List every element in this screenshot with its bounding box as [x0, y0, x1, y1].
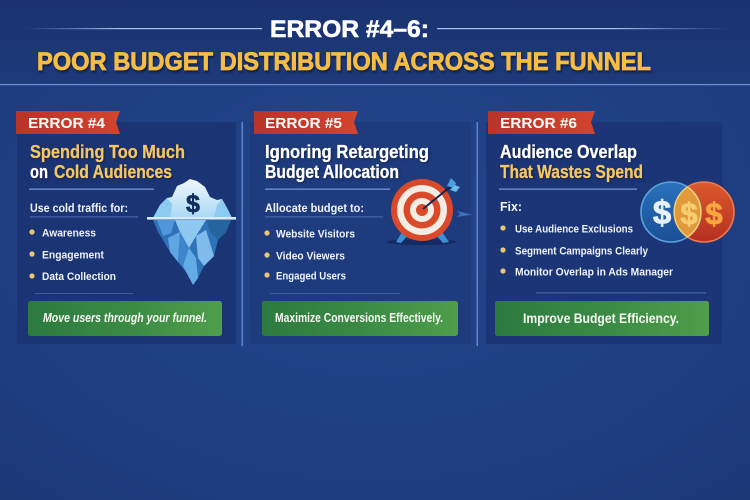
- heading: ignoring retargeting budget allocation: Ignoring Retargeting: [265, 142, 429, 162]
- list: retargeting audiences: Video Viewers: [276, 250, 345, 262]
- subheading: fix: Fix:: [500, 200, 522, 214]
- ribbon: error 5: ERROR #5: [265, 115, 342, 132]
- list: cold traffic uses: Engagement: [42, 250, 104, 262]
- icon: overlapping dollar circles: $: [680, 196, 698, 231]
- title: poor budget distribution: POOR BUDGET DISTRIBUTION ACROSS THE FUNNEL: [37, 48, 651, 76]
- ribbon: error 6: ERROR #6: [500, 115, 577, 132]
- ribbon: error 4: [16, 111, 120, 134]
- title: error range: ERROR #4–6:: [270, 16, 429, 43]
- glyph: dollar: $: [186, 190, 200, 218]
- heading: audience overlap that wastes spend: That Wastes Spend: [500, 162, 643, 182]
- icon: overlapping dollar circles: [641, 182, 734, 242]
- subheading: use cold traffic: Use cold traffic for:: [30, 201, 128, 215]
- list: overlap fixes: Segment Campaigns Clearly: [515, 246, 649, 258]
- subheading: allocate budget: Allocate budget to:: [265, 201, 364, 215]
- heading: audience overlap that wastes spend: [500, 142, 643, 182]
- list: cold traffic uses: [29, 228, 116, 283]
- list: retargeting audiences: Engaged Users: [276, 270, 346, 282]
- heading: spending too much on cold audiences: on: [30, 162, 48, 182]
- button: move users: [28, 301, 222, 336]
- icon: overlapping dollar circles: $: [653, 194, 671, 231]
- heading: audience overlap that wastes spend: Audience Overlap: [500, 142, 637, 162]
- list: cold traffic uses: Awareness: [42, 228, 96, 240]
- list: retargeting audiences: Website Visitors: [276, 228, 355, 240]
- heading: ignoring retargeting budget allocation: Budget Allocation: [265, 162, 399, 182]
- icon: iceberg with dollar: [147, 179, 236, 285]
- heading: spending too much on cold audiences: [30, 142, 185, 182]
- list: overlap fixes: Monitor Overlap in Ads Manager: [515, 266, 674, 278]
- heading: spending too much on cold audiences: Spending Too Much: [30, 142, 185, 162]
- button: improve budget efficiency: Improve Budget Efficiency.: [523, 311, 679, 326]
- button: improve budget efficiency: [495, 301, 709, 336]
- list: retargeting audiences: [264, 228, 355, 282]
- button: maximize conversions: Maximize Conversions Effectively.: [275, 311, 443, 325]
- button: maximize conversions: [262, 301, 458, 336]
- heading: spending too much on cold audiences: Cold Audiences: [54, 162, 172, 182]
- ribbon: error 6: [488, 111, 595, 134]
- panel: error 4: [16, 111, 243, 346]
- panel: error 6: [486, 111, 734, 344]
- panel: error 5: [250, 111, 478, 346]
- icon: overlapping dollar circles: $: [705, 196, 723, 231]
- ribbon: error 4: ERROR #4: [28, 115, 106, 132]
- list: overlap fixes: [500, 224, 674, 278]
- ribbon: error 5: [254, 111, 358, 134]
- button: move users: Move users through your funnel.: [43, 311, 207, 325]
- list: overlap fixes: Use Audience Exclusions: [515, 224, 633, 236]
- heading: ignoring retargeting budget allocation: [265, 142, 429, 182]
- icon: target with arrow: [387, 178, 472, 245]
- list: cold traffic uses: Data Collection: [42, 271, 116, 283]
